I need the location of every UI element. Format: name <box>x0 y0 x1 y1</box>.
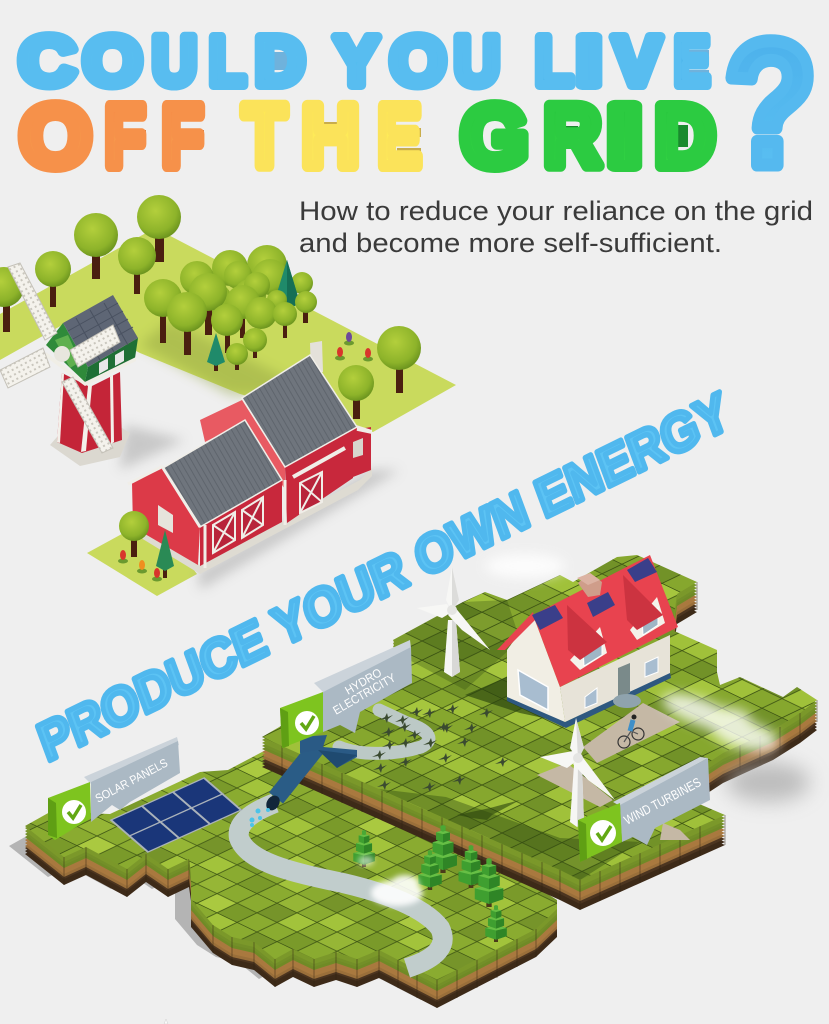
title line two yellow word: E <box>378 88 421 185</box>
house foundation <box>507 672 671 728</box>
windmill sails <box>8 263 57 340</box>
title line one: V <box>613 22 661 100</box>
cyclist <box>618 714 644 748</box>
wind turbine two <box>540 718 615 827</box>
subtitle: How to reduce your reliance on the grid <box>299 196 813 226</box>
forest cluster <box>144 245 317 371</box>
lower terrain tiles <box>25 752 557 980</box>
clouds <box>358 554 810 906</box>
windmill cap windows <box>99 350 124 374</box>
title letter depth shading <box>124 50 709 157</box>
title line two yellow word: H <box>302 88 359 185</box>
hydro dam and pipe <box>263 735 357 813</box>
upper terrain cube edges <box>282 582 817 910</box>
sign: hydro electricity: ELECTRICITY <box>330 670 398 718</box>
tree by barn <box>119 511 174 578</box>
shadow along upper front edge <box>379 789 640 880</box>
title: could you live off the grid <box>19 4 817 203</box>
windmill tower <box>57 372 122 453</box>
farm ground <box>0 228 456 432</box>
island ground shadow <box>9 772 541 1000</box>
title line one: O <box>390 22 446 100</box>
flowers <box>118 332 373 582</box>
barn ground patch <box>87 517 197 596</box>
title line one: D <box>255 22 305 100</box>
house shadow <box>465 677 567 723</box>
sign: wind turbines <box>578 757 710 862</box>
cloud shadow <box>726 762 810 802</box>
windmill <box>0 263 138 466</box>
back barn roof <box>242 355 357 467</box>
subtitle <box>299 196 813 258</box>
lower terrain cube edges <box>64 847 536 1008</box>
cloud: river <box>371 875 423 906</box>
dormer one <box>570 627 607 670</box>
upper river <box>339 710 429 753</box>
tiny dark marks on the field <box>372 704 509 792</box>
cloud: right <box>658 686 781 757</box>
sign: hydro electricity: HYDRO <box>342 665 384 698</box>
shadow behind house <box>393 600 520 690</box>
title line two yellow word: T <box>243 88 286 185</box>
back barn wall <box>285 427 357 523</box>
sign: solar panels <box>48 737 180 840</box>
front barn wall <box>200 480 282 566</box>
house windows and door <box>518 670 548 710</box>
house roof <box>533 555 678 687</box>
title line one: L <box>535 22 573 100</box>
house <box>497 555 678 728</box>
back barn gable <box>200 400 285 490</box>
trees: right of forest <box>338 326 421 419</box>
sign: hydro electricity <box>280 640 412 748</box>
title line two orange word: O <box>20 88 91 185</box>
barn <box>128 341 372 574</box>
lower terrain <box>25 752 557 1008</box>
front barn gable <box>132 468 200 565</box>
title line one: E <box>674 22 710 100</box>
pine trees <box>353 825 507 942</box>
soft ground shadows <box>120 320 400 590</box>
front barn doors <box>213 512 235 553</box>
barn chimney <box>310 341 323 372</box>
house left wall <box>507 615 565 722</box>
upper terrain sides <box>262 558 817 910</box>
windmill base <box>50 428 130 466</box>
dormer two <box>630 597 665 640</box>
title line two green word: R <box>544 88 601 185</box>
title line two orange word: F <box>162 88 203 185</box>
title line one: O <box>83 22 142 100</box>
turbine shadow <box>457 800 520 820</box>
title line two green word: G <box>461 88 528 185</box>
solar panel array <box>111 778 241 852</box>
title line one: U <box>454 22 500 100</box>
title line one: I <box>576 22 602 100</box>
lower terrain sides <box>25 754 557 1008</box>
house front wall <box>560 635 670 722</box>
trees: left row <box>0 195 181 332</box>
back barn door <box>300 472 322 513</box>
windmill roof <box>63 295 138 367</box>
title line one: C <box>19 22 76 100</box>
subtitle: and become more self-sufficient. <box>299 228 722 258</box>
barn base <box>128 468 372 574</box>
title line one: L <box>209 22 246 100</box>
garden path <box>537 703 690 840</box>
cloud: top <box>485 554 565 578</box>
front barn roof <box>163 420 282 527</box>
sign: solar panels: SOLAR PANELS <box>93 756 170 806</box>
title line one: U <box>152 22 197 100</box>
lower river <box>239 803 443 968</box>
small artefact at page bottom <box>164 1019 168 1024</box>
heading: produce your own energy: PRODUCE YOUR OWN ENERGY <box>30 381 737 773</box>
back barn side annex <box>353 427 371 477</box>
house chimney <box>578 573 602 597</box>
upper terrain tiles <box>262 555 817 880</box>
cloud: small near pine <box>358 856 374 866</box>
title line two green word: D <box>655 88 715 185</box>
title line one: Y <box>334 22 379 100</box>
windmill cap <box>46 323 88 382</box>
title line two green word: I <box>607 88 642 185</box>
sign: wind turbines: WIND TURBINES <box>621 774 704 828</box>
roof solar panels <box>532 605 563 630</box>
wind turbine one <box>417 567 490 677</box>
upper terrain <box>262 555 817 910</box>
water drops <box>250 808 270 827</box>
title line two orange word: F <box>105 88 145 185</box>
